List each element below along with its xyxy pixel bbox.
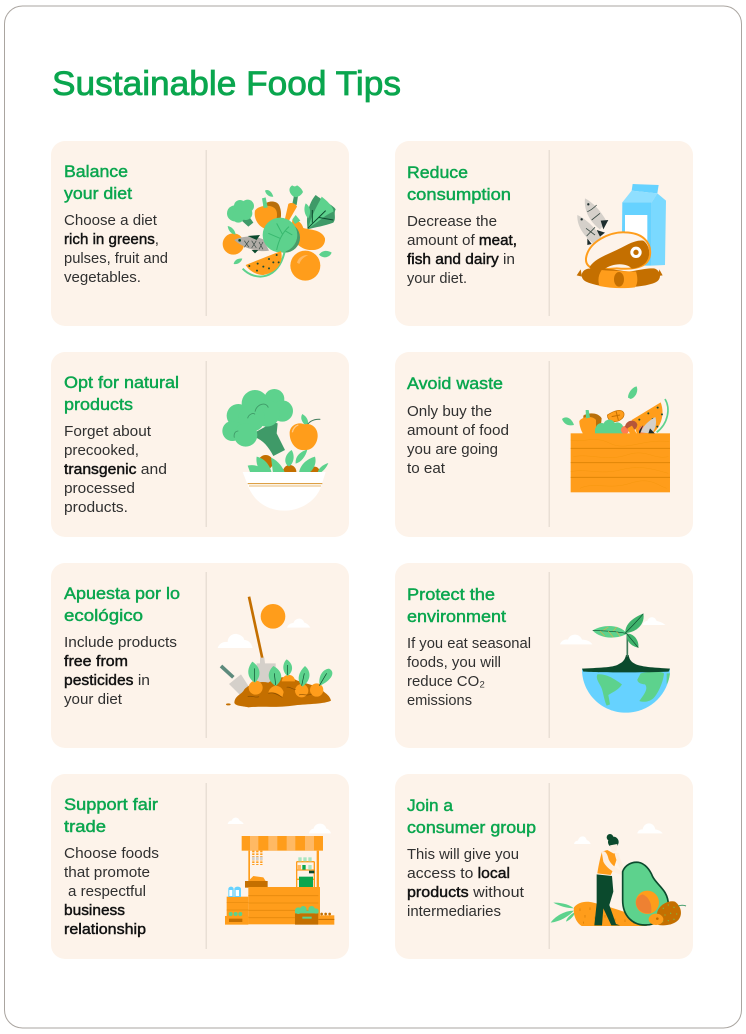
text: join a consumer group: access to local [407,865,510,882]
icon: woman with carrot, avocado and strawberry [551,823,686,926]
text: opt for natural products: transgenic and [64,461,167,478]
icon: sun, shovels and carrots in soil [218,597,332,707]
heading: support fair trade: trade [64,817,106,836]
heading: protect the environment: environment [407,607,506,626]
heading: protect the environment [407,585,506,626]
text: join a consumer group [407,846,525,920]
text: apuesta por lo ecologico: Include products [64,634,177,651]
icon: globe with sprout [560,614,670,713]
text: apuesta por lo ecologico: your diet [64,691,123,708]
text: apuesta por lo ecologico: free from [64,653,128,670]
text: balance your diet: pulses, fruit and [64,250,168,267]
heading: join a consumer group [407,796,536,837]
panel: apuesta por lo ecologico [51,563,349,748]
text: protect the environment: emissions [407,692,472,709]
text: apuesta por lo ecologico [64,634,177,708]
panel: protect the environment [395,563,693,748]
text: reduce consumption: fish and dairy in [407,251,515,268]
heading: balance your diet: your diet [64,184,132,203]
text: opt for natural products [64,423,167,516]
text: reduce consumption: amount of meat, [407,232,517,249]
title: Sustainable Food Tips [52,65,401,103]
text: support fair trade: that promote [64,864,150,881]
text: join a consumer group: products without [407,884,525,901]
text: opt for natural products: products. [64,499,128,516]
text: support fair trade [64,845,159,938]
text: avoid waste: you are going [407,441,498,458]
icon: salad bowl with broccoli and apple [222,389,328,511]
panel: opt for natural products [51,352,349,537]
text: balance your diet: rich in greens, [64,231,159,248]
text: protect the environment: foods, you will [407,654,501,671]
text: support fair trade: business [64,902,125,919]
text: join a consumer group: intermediaries [407,903,501,920]
text: opt for natural products: precooked, [64,442,139,459]
text: avoid waste: to eat [407,460,446,477]
icon: market stall [225,818,334,925]
text: opt for natural products: Forget about [64,423,152,440]
heading: opt for natural products: products [64,395,133,414]
panel: balance your diet [51,141,349,326]
panel: reduce consumption [395,141,693,326]
text: avoid waste: amount of food [407,422,509,439]
text: balance your diet: Choose a diet [64,212,158,229]
heading: protect the environment: Protect the [407,585,495,604]
panel: join a consumer group [395,774,693,959]
heading: balance your diet [64,162,132,203]
heading: support fair trade: Support fair [64,795,158,814]
text: protect the environment: If you eat seasonal [407,635,531,652]
heading: apuesta por lo ecologico [64,584,180,625]
text: balance your diet [64,212,168,286]
heading: balance your diet: Balance [64,162,128,181]
text: protect the environment [407,635,531,709]
text: reduce consumption: your diet. [407,270,467,287]
text: protect the environment: reduce CO₂ [407,673,485,690]
text: join a consumer group: This will give you [407,846,519,863]
heading: reduce consumption: consumption [407,185,511,204]
heading: reduce consumption: Reduce [407,163,468,182]
text: avoid waste: Only buy the [407,403,492,420]
icon: vegetables and fruit [223,185,336,281]
text: support fair trade: a respectful [68,883,146,900]
heading: support fair trade [64,795,158,836]
heading: join a consumer group: consumer group [407,818,536,837]
heading: reduce consumption [407,163,511,204]
icon: fish, milk, steak and sausage [577,184,666,288]
panel: support fair trade [51,774,349,959]
text: support fair trade: Choose foods [64,845,159,862]
text: balance your diet: vegetables. [64,269,141,286]
text: opt for natural products: processed [64,480,135,497]
text: reduce consumption [407,213,517,287]
heading: join a consumer group: Join a [407,796,454,815]
heading: apuesta por lo ecologico: ecológico [64,606,143,625]
heading: apuesta por lo ecologico: Apuesta por lo [64,584,180,603]
text: support fair trade: relationship [64,921,146,938]
heading: opt for natural products [64,373,179,414]
icon: crate of food [562,386,670,492]
text: apuesta por lo ecologico: pesticides in [64,672,150,689]
heading: opt for natural products: Opt for natural [64,373,179,392]
text: reduce consumption: Decrease the [407,213,497,230]
text: avoid waste [407,403,509,477]
panel: avoid waste [395,352,693,537]
heading: avoid waste: Avoid waste [407,374,503,393]
